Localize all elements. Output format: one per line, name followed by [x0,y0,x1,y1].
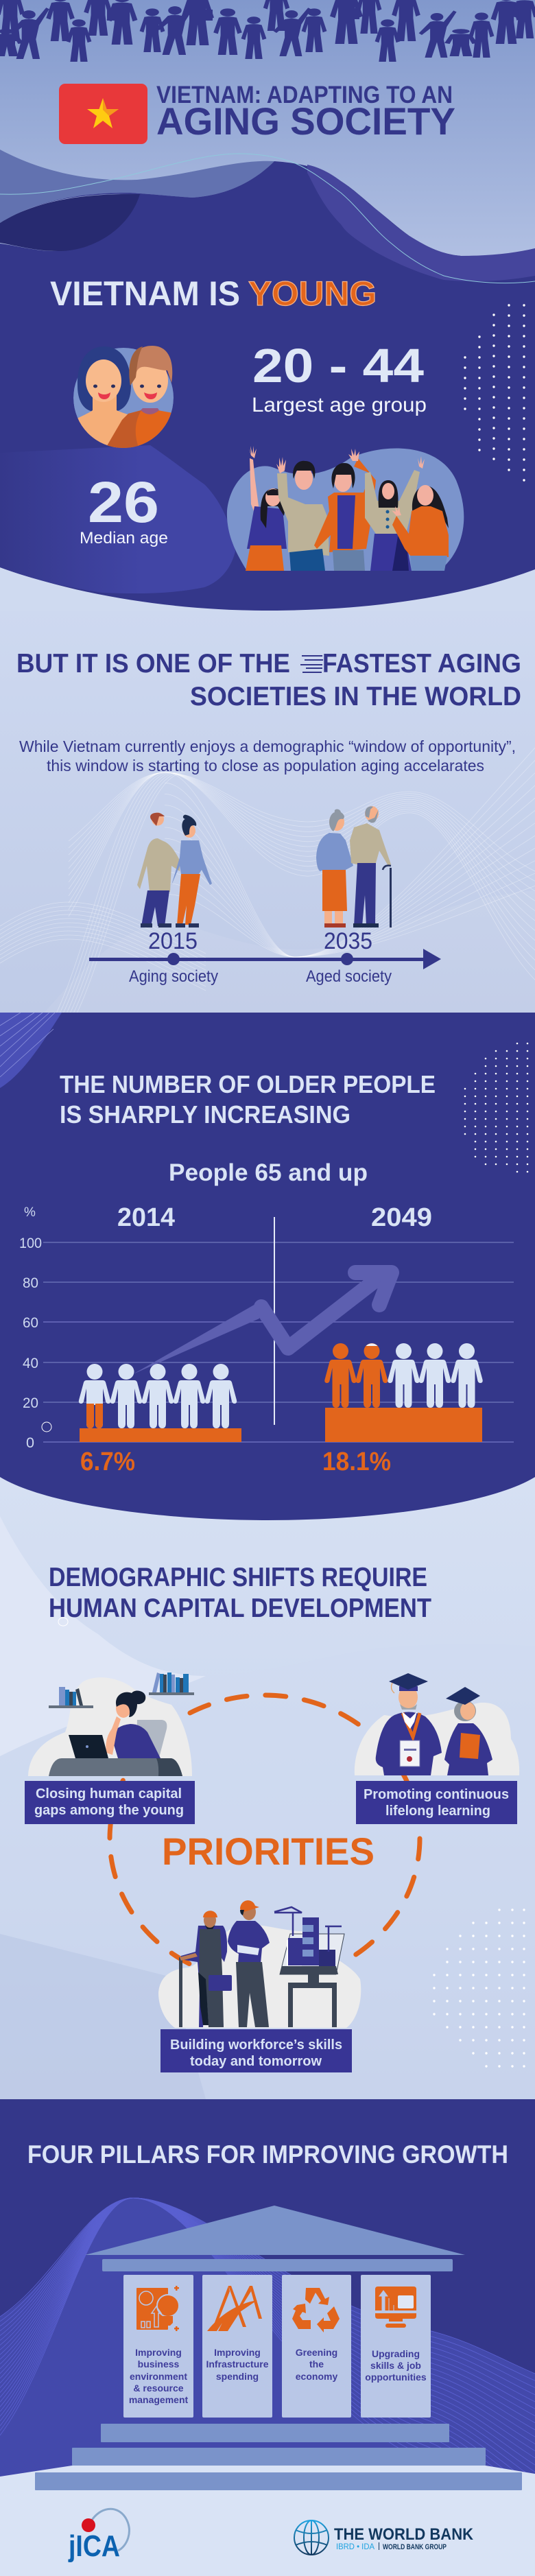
pillar: infrastructure spending [202,2275,272,2418]
heading: one of the fastest aging societies: BUT IT IS ONE OF THE [16,649,290,678]
pillar text: business [138,2359,180,2370]
logo: The World Bank: WORLD BANK GROUP [383,2543,447,2551]
priority: closing human capital gaps [25,1673,195,1824]
chart title: People 65 and up [169,1159,368,1186]
axis labels: 40 [23,1356,38,1371]
heading: number of older people [60,1070,436,1129]
illustration: group of young people [227,446,464,571]
label [160,2029,352,2072]
illustration: couple in 2015 [137,812,212,927]
label [25,1781,195,1824]
logo: JICA: jICA [68,2529,120,2563]
person: man in beige sweater [276,457,329,571]
crowd silhouettes [0,0,535,62]
priorities dashed ring [110,1695,420,1982]
heading: Vietnam is young: YOUNG [248,274,377,313]
pillar text: economy [296,2371,337,2382]
panel: Vietnam is young [0,150,535,611]
pillar text: spending [216,2371,259,2382]
axis labels: 20 [23,1395,38,1411]
heading: number of older people: IS SHARPLY INCREASING [60,1100,350,1129]
stat: median age [80,470,168,547]
heading: Vietnam is young: VIETNAM IS [50,274,240,313]
axis labels: % [24,1205,36,1220]
pillar text: Infrastructure [206,2359,269,2370]
heading: four pillars: FOUR PILLARS FOR IMPROVING GROWTH [27,2140,508,2169]
priority: building workforce skills: today and tomorrow [190,2054,322,2069]
person: man in orange jacket [314,449,376,571]
icon: monitor with briefcase [375,2287,416,2328]
icon: money and lightbulb [136,2286,179,2331]
axis labels: 60 [23,1315,38,1331]
pillar text [206,2347,269,2382]
dots pattern [465,1043,527,1177]
heading: one of the fastest aging societies [16,649,521,711]
bar chart: share of people 65 and up [19,1203,514,1476]
temple diagram [35,2206,522,2490]
background: section four [0,1475,535,2099]
pillar text: Greening [296,2347,337,2358]
axis labels: 80 [23,1275,38,1291]
bar 2014: 6.7 percent [79,1364,241,1442]
title [156,82,455,143]
icon: two young faces [73,346,174,453]
person: woman in beige cardigan [365,456,425,571]
axis labels: 100 [19,1236,42,1251]
icon: speed lines [300,655,323,673]
icon: recycle [292,2288,340,2332]
pillar: upgrading skills [361,2275,431,2418]
pillar: business environment [123,2275,193,2418]
pillar text: management [129,2394,189,2405]
temple steps [35,2424,522,2490]
illustration: crane and monitor [274,1907,344,2027]
pillar text: & resource [133,2383,184,2394]
pillar text: the [309,2359,324,2370]
value labels: 6.7% [80,1447,135,1476]
axis labels: 0 [26,1435,34,1451]
icon: bridge [207,2286,262,2331]
heading: number of older people: THE NUMBER OF OLDER PEOPLE [60,1070,436,1098]
heading: one of the fastest aging societies: FASTEST [322,649,431,678]
heading: human capital development [49,1563,431,1623]
stat: largest age group: 20 - 44 [252,339,424,392]
timeline arrow [89,949,441,969]
heading: one of the fastest aging societies: AGING [438,649,521,678]
logo: The World Bank: IBRD • IDA [336,2542,374,2551]
dots pattern [465,305,524,482]
heading: human capital development: HUMAN CAPITAL DEVELOPMENT [49,1594,431,1623]
pillar text: Improving [135,2347,182,2358]
logo: JICA [68,2509,129,2563]
text block: window of opportunity: this window is starting to close as population aging accelarates [47,757,484,775]
pillar text: skills & job [370,2360,421,2371]
logo: The World Bank [294,2520,474,2555]
pillar text: environment [130,2371,187,2382]
value labels: 18.1% [322,1447,391,1476]
label [356,1781,517,1824]
year labels [117,1203,432,1232]
timeline labels [129,928,392,986]
stat: median age: 26 [88,470,159,534]
pillar text: Improving [214,2347,261,2358]
text block: window of opportunity: While Vietnam currently enjoys a demographic “window of opportunity”, [19,737,516,755]
text block: window of opportunity [19,737,516,775]
dots pattern [434,1910,524,2079]
year labels: 2014 [117,1203,175,1232]
flag of Vietnam [59,84,147,144]
panel: older people chart [0,1013,535,1520]
priority: closing human capital gaps: Closing human capital [36,1786,182,1801]
timeline labels: 2035 [324,928,372,954]
stat: largest age group: Largest age group [252,394,427,416]
illustration: woman at laptop [28,1673,194,1776]
heading: Vietnam is young [50,274,377,313]
priority: building workforce skills [158,1900,361,2072]
background: footer [0,2466,535,2576]
illustration: construction workers [158,1900,361,2028]
value labels [80,1447,391,1476]
timeline labels: Aging society [129,967,218,986]
stat: median age: Median age [80,529,168,547]
title: VIETNAM: ADAPTING TO AN [156,82,453,108]
timeline labels: Aged society [306,967,392,986]
axis labels [19,1205,42,1451]
timeline point 2035 [341,953,353,965]
logo: The World Bank: THE WORLD BANK [334,2525,474,2544]
person: woman in blue top [246,446,287,571]
timeline labels: 2015 [148,928,198,954]
priority: building workforce skills: Building workforce’s skills [170,2037,342,2053]
pillar text [365,2348,427,2383]
background: upper sections [0,0,535,1013]
priority: continuous lifelong learning: lifelong learning [385,1804,490,1819]
bar 2049: 18.1 percent [324,1343,483,1442]
pillar text [296,2347,337,2382]
heading: human capital development: DEMOGRAPHIC SHIFTS REQUIRE [49,1563,427,1592]
heading: priorities: PRIORITIES [162,1830,374,1873]
person: woman in orange sweater [392,485,449,571]
temple roof [85,2206,465,2255]
heading: one of the fastest aging societies: SOCIETIES IN THE WORLD [190,682,521,711]
pillar text: opportunities [365,2372,427,2383]
stat: largest age group [252,339,427,416]
illustration: elderly couple in 2035 [316,806,392,927]
priority: continuous lifelong learning: Promoting continuous [364,1787,509,1802]
panel: four pillars [0,2099,535,2549]
title: AGING SOCIETY [156,99,455,143]
year labels: 2049 [371,1203,432,1232]
pillar text: Upgrading [372,2348,420,2359]
timeline point 2015 [167,953,180,965]
pillar: greening the economy [282,2275,351,2418]
pillar text [129,2347,189,2405]
illustration: graduates [355,1673,519,1775]
priority: closing human capital gaps: gaps among the young [34,1803,184,1818]
arrow: rising trend [133,1273,392,1374]
priority: continuous lifelong learning [355,1673,519,1824]
